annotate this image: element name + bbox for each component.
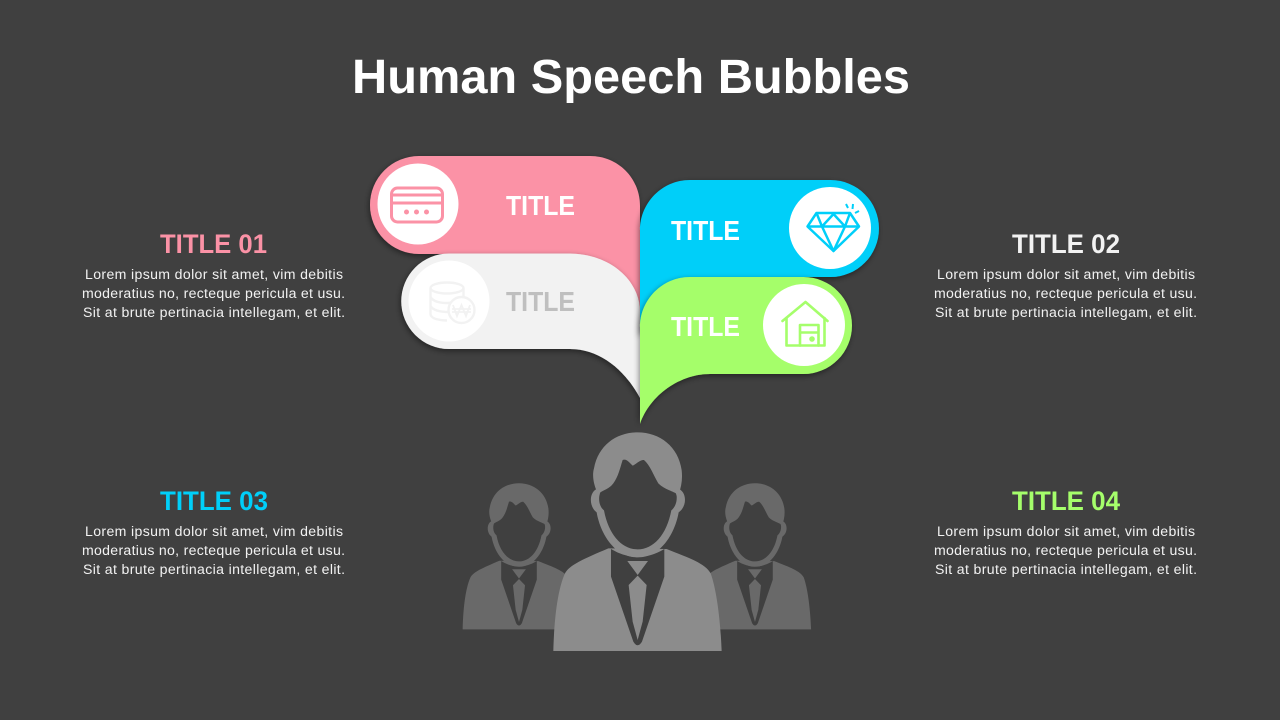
text block: title 01: TITLE 01 [160, 229, 267, 259]
speech bubble: pink: TITLE [506, 190, 575, 221]
text block: title 03: Lorem ipsum dolor sit amet, vim debitis [85, 523, 343, 539]
text block: title 02: moderatius no, recteque pericula et usu. [934, 285, 1197, 301]
text block: title 03: TITLE 03 [160, 486, 268, 516]
speech bubble: green: TITLE [671, 311, 740, 342]
text block: title 03: Sit at brute pertinacia intellegam, et elit. [83, 561, 345, 577]
text block: title 01 [82, 229, 345, 320]
speech bubble: grey [401, 254, 640, 398]
text block: title 01: Sit at brute pertinacia intellegam, et elit. [83, 304, 345, 320]
icon: diamond [808, 204, 859, 251]
text block: title 02: Sit at brute pertinacia intellegam, et elit. [935, 304, 1197, 320]
icon: credit card [392, 188, 442, 222]
text block: title 02 [934, 229, 1197, 320]
speech bubble: pink [370, 156, 640, 340]
title: Human Speech Bubbles [352, 51, 910, 104]
speech bubble: blue: TITLE [671, 215, 740, 246]
text block: title 04: moderatius no, recteque pericula et usu. [934, 542, 1197, 558]
text block: title 03: moderatius no, recteque pericula et usu. [82, 542, 345, 558]
text block: title 01: Lorem ipsum dolor sit amet, vim debitis [85, 266, 343, 282]
icon: warehouse house [782, 302, 828, 346]
speech bubble: green [640, 277, 852, 424]
people silhouettes [463, 432, 811, 651]
person: right [699, 483, 811, 629]
text block: title 03 [82, 486, 345, 577]
text block: title 02: TITLE 02 [1012, 229, 1120, 259]
person: center [553, 432, 722, 651]
text block: title 02: Lorem ipsum dolor sit amet, vim debitis [937, 266, 1195, 282]
icon: coins [430, 282, 474, 323]
speech bubble: grey: TITLE [506, 286, 575, 317]
text block: title 04 [934, 486, 1197, 577]
person: left [463, 483, 575, 629]
text block: title 04: TITLE 04 [1012, 486, 1120, 516]
speech bubble: blue [640, 180, 879, 335]
text block: title 04: Lorem ipsum dolor sit amet, vim debitis [937, 523, 1195, 539]
text block: title 04: Sit at brute pertinacia intellegam, et elit. [935, 561, 1197, 577]
text block: title 01: moderatius no, recteque pericula et usu. [82, 285, 345, 301]
